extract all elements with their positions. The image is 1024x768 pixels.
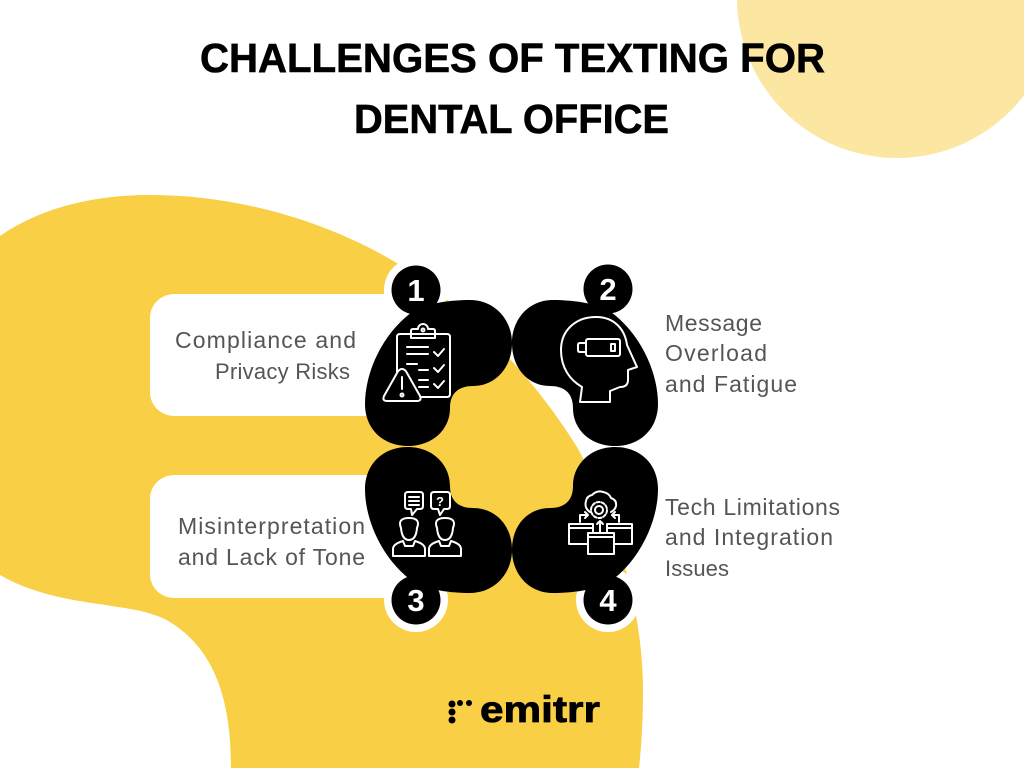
label 1 bbox=[175, 327, 356, 384]
blob 4 bbox=[512, 447, 658, 593]
challenge 3: misinterpretation and lack of tone bbox=[178, 447, 512, 632]
icon: head with low battery bbox=[561, 317, 637, 402]
icon: two people with speech bubbles: ? bbox=[436, 494, 444, 509]
blob 3 bbox=[365, 447, 512, 593]
decorative circle: top right bbox=[737, 0, 1024, 158]
icon: two people with speech bubbles bbox=[393, 492, 461, 556]
label 2: and Fatigue bbox=[665, 371, 797, 397]
badge 3 bbox=[384, 568, 448, 632]
title: CHALLENGES OF TEXTING FOR bbox=[200, 35, 825, 81]
label 3: Misinterpretation bbox=[178, 513, 365, 539]
title bbox=[200, 35, 825, 142]
label 3: and Lack of Tone bbox=[178, 544, 365, 570]
label 2: Message bbox=[665, 310, 762, 336]
label 4: and Integration bbox=[665, 524, 833, 550]
challenge 2: message overload and fatigue bbox=[512, 264, 797, 446]
badge 2: 2 bbox=[599, 272, 617, 307]
badge 3: 3 bbox=[407, 583, 425, 618]
label 4 bbox=[665, 494, 840, 581]
badge 4: 4 bbox=[599, 583, 617, 618]
label 3 bbox=[178, 513, 365, 570]
label 2: Overload bbox=[665, 340, 767, 366]
badge 4 bbox=[576, 568, 640, 632]
blob 2 bbox=[512, 300, 658, 446]
icon: clipboard with warning bbox=[383, 324, 450, 401]
panel: misinterpretation label background bbox=[150, 475, 430, 598]
yellow background blob bbox=[0, 195, 643, 768]
logo dots bbox=[448, 700, 472, 724]
blob 1 bbox=[365, 300, 512, 446]
label 4: Issues bbox=[665, 556, 729, 581]
challenge 4: tech limitations and integration issues bbox=[512, 447, 840, 632]
label 4: Tech Limitations bbox=[665, 494, 840, 520]
challenge 1: compliance and privacy risks bbox=[175, 258, 512, 446]
badge 1: 1 bbox=[407, 273, 425, 308]
title: DENTAL OFFICE bbox=[354, 96, 669, 142]
panel: compliance label background bbox=[150, 294, 425, 416]
logo: emitrr: emitrr bbox=[480, 689, 600, 730]
badge 2 bbox=[584, 264, 632, 314]
icon: cloud, gear and windows bbox=[569, 491, 632, 554]
label 2 bbox=[665, 310, 797, 397]
label 1: Privacy Risks bbox=[215, 359, 350, 384]
badge 1 bbox=[384, 258, 448, 322]
label 1: Compliance and bbox=[175, 327, 356, 353]
logo: emitrr bbox=[448, 689, 600, 730]
